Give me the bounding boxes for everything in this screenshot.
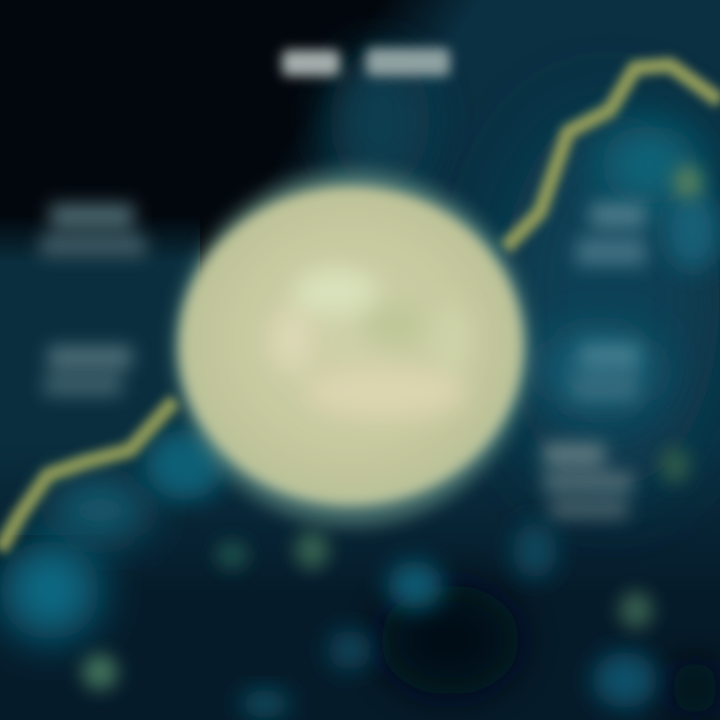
chart line: left segment [0, 400, 175, 550]
text smudge: left upper label [40, 204, 146, 256]
text smudge: top heading [282, 48, 450, 76]
coin [174, 170, 530, 526]
text smudge: left lower label [44, 346, 132, 396]
text smudge: right upper label [576, 203, 646, 266]
chart line: right segment [505, 65, 720, 248]
small olive data dots [82, 165, 703, 690]
text smudge: right lower label [543, 443, 633, 518]
coin relief [270, 268, 472, 418]
text smudge: right middle label [572, 343, 640, 400]
